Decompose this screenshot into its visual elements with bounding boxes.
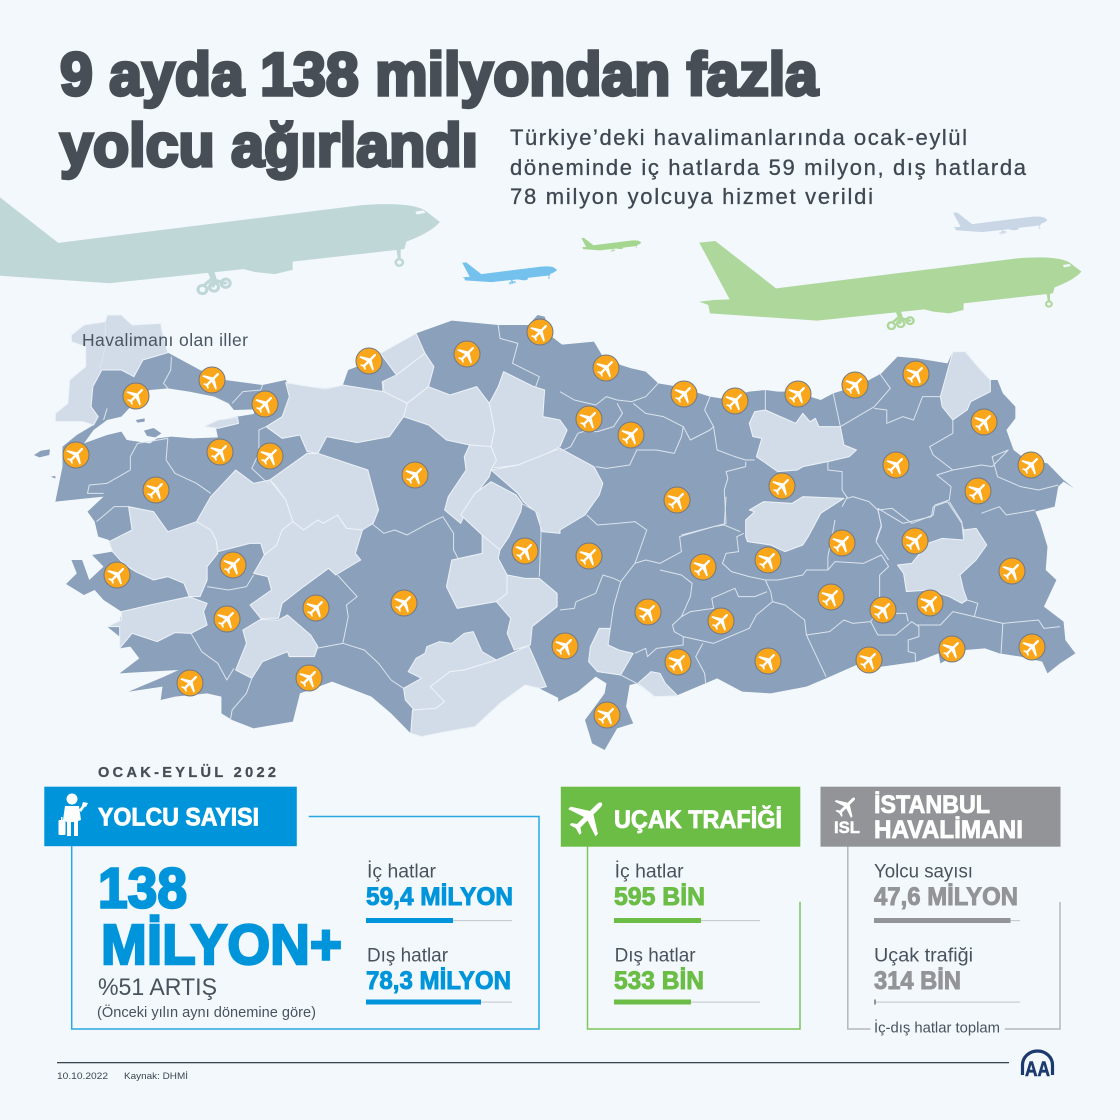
airport passengers: 47,6 MİLYON [874, 883, 1018, 911]
panel heading: İSTANBUL [874, 791, 990, 819]
panel heading: UÇAK TRAFİĞİ [614, 805, 782, 834]
subtitle text block: Türkiye’deki havalimanlarında ocak-eylül [510, 125, 967, 150]
logo: AA: AA [1025, 1058, 1050, 1081]
source: Kaynak: DHMİ [124, 1071, 188, 1082]
small green airplane [581, 238, 641, 252]
airport markers [63, 319, 1045, 728]
panel header [44, 787, 297, 846]
title: yolcu ağırlandı [60, 112, 478, 179]
subtitle text block: 78 milyon yolcuya hizmet verildi [510, 184, 873, 209]
province border lines [87, 322, 1060, 720]
icon: airplane [561, 789, 615, 843]
international flights: Dış hatlar [615, 946, 696, 967]
airport flights [874, 946, 1020, 1004]
airport flights: 314 BİN [874, 967, 961, 995]
subtitle text block [510, 125, 1027, 209]
domestic passengers: İç hatlar [367, 862, 437, 883]
icon: airplane with ISL code [830, 790, 863, 837]
small blue airplane [462, 262, 557, 284]
icon: airplane with ISL code: ISL [834, 818, 860, 837]
panel header [561, 787, 800, 847]
map base: south-west land [55, 480, 562, 737]
icon: passenger with suitcase [58, 794, 88, 836]
title [60, 41, 819, 179]
footnote: İç-dış hatlar toplam [874, 1019, 1000, 1037]
light provinces: no airport [55, 315, 990, 737]
panel frame [588, 846, 800, 1029]
growth rate: %51 ARTIŞ [98, 974, 217, 1001]
small grey airplane [953, 212, 1047, 234]
panel: passenger count [44, 787, 539, 1029]
logo: AA [1022, 1051, 1052, 1081]
panel heading: HAVALİMANI [874, 816, 1023, 844]
title: 9 ayda 138 milyondan fazla [60, 41, 819, 108]
domestic flights [614, 862, 760, 923]
map: Türkiye provinces [34, 315, 1075, 750]
map base: south-east land [558, 480, 1075, 750]
footer rule [57, 1062, 1009, 1063]
large green airplane [699, 241, 1081, 329]
sea of Marmara [84, 388, 255, 443]
panel heading [874, 791, 1023, 844]
panel: Istanbul Airport [820, 787, 1060, 1037]
subtitle text block: döneminde iç hatlarda 59 milyon, dış hatlarda [510, 155, 1027, 180]
map base: north-west land [55, 315, 562, 533]
airport flights: Uçak trafiği [874, 946, 973, 967]
panel frame [72, 816, 539, 1029]
international flights [614, 946, 760, 1004]
international passengers [366, 946, 512, 1004]
panel: aircraft traffic [561, 787, 800, 1029]
big number: 138 [98, 857, 187, 921]
international passengers: 78,3 MİLYON [366, 967, 511, 995]
airport passengers [874, 862, 1020, 923]
big number [98, 857, 342, 977]
growth note: (Önceki yılın aynı dönemine göre) [97, 1003, 316, 1021]
large teal airplane [0, 184, 440, 294]
international flights: 533 BİN [614, 967, 704, 995]
panel frame [848, 846, 1060, 1029]
domestic passengers [366, 862, 513, 923]
airport passengers: Yolcu sayısı [874, 862, 973, 883]
big number: MİLYON+ [101, 913, 342, 977]
panel heading: YOLCU SAYISI [98, 804, 259, 832]
domestic flights: İç hatlar [615, 862, 684, 883]
date: 10.10.2022 [57, 1071, 108, 1082]
map label: Havalimanı olan iller [82, 330, 248, 350]
period heading: OCAK-EYLÜL 2022 [98, 764, 276, 781]
domestic passengers: 59,4 MİLYON [366, 883, 513, 911]
islands [34, 418, 161, 479]
map base: north-east land [558, 342, 1074, 540]
international passengers: Dış hatlar [367, 946, 449, 967]
domestic flights: 595 BİN [614, 883, 705, 911]
panel header [820, 787, 1060, 847]
